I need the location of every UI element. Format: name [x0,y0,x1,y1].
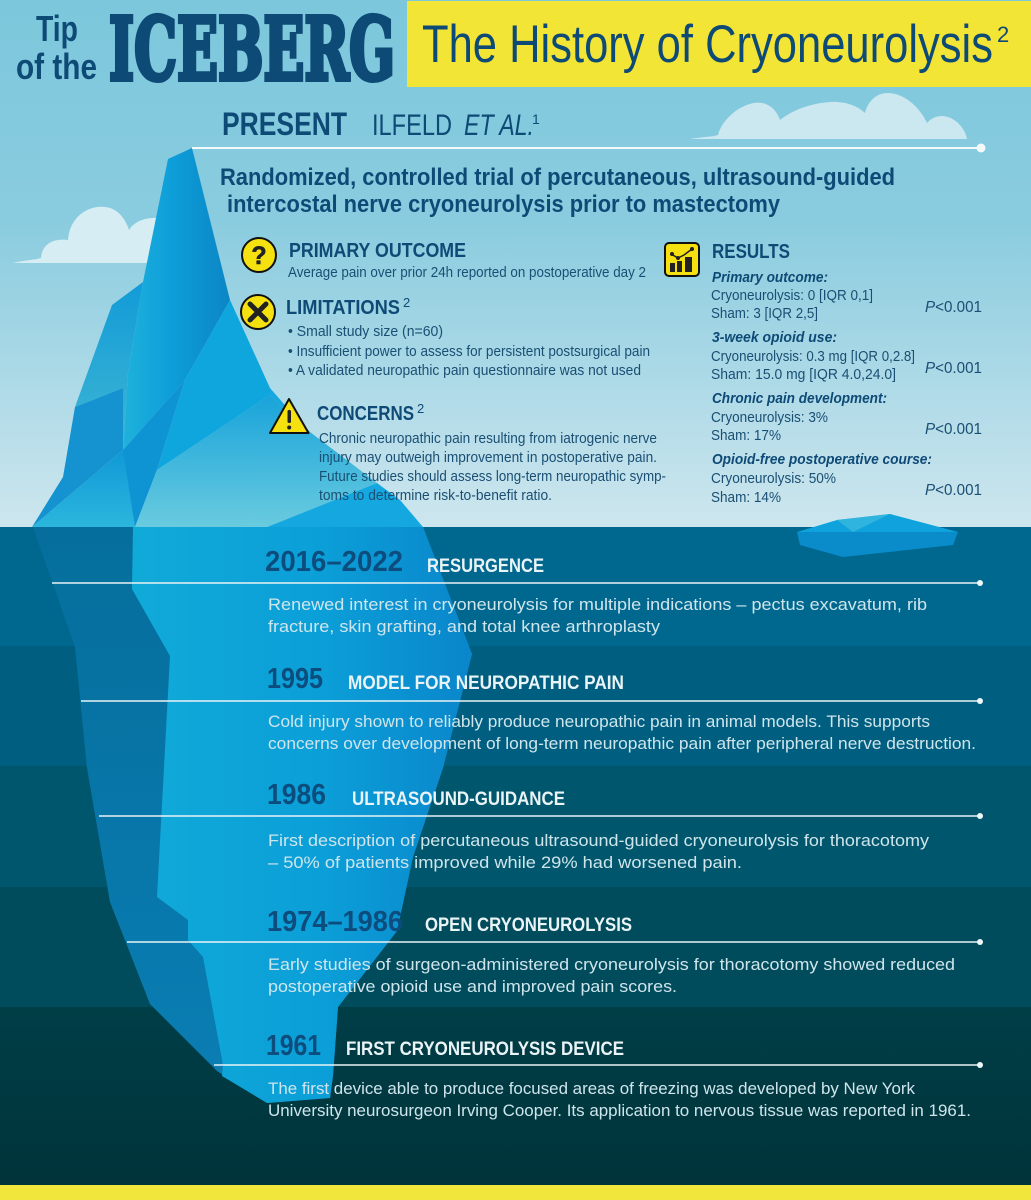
iceberg: main spire [123,148,230,450]
icon: question mark: ? [251,242,267,270]
panel: concerns [270,399,666,504]
study description: intercostal nerve cryoneurolysis prior to mastectomy [227,191,781,218]
result: opioid-free course: Opioid-free postoperative course: [712,452,932,468]
panel: concerns: Future studies should assess long-term neuropathic symp- [319,469,666,485]
panel: results: RESULTS [712,241,790,263]
panel: limitations: • A validated neuropathic pain questionnaire was not used [288,363,641,379]
iceberg [32,148,472,1103]
timeline: 1961 first cryoneurolysis device: 1961 [266,1030,321,1062]
timeline: 1974-1986 open cryoneurolysis [127,906,983,996]
present timeline rule [192,144,986,152]
panel: primary outcome [242,238,646,281]
iceberg: lower right facet [267,483,423,527]
result: primary outcome: Sham: 3 [IQR 2,5] [711,306,818,322]
icon: question mark [242,238,276,272]
iceberg: underwater inner facet [132,527,472,1103]
panel: limitations [241,295,650,379]
result: primary outcome: Primary outcome: [712,270,828,286]
iceberg: underwater outer facet [33,527,472,1103]
panel: limitations: LIMITATIONS [286,297,400,319]
result: chronic pain: Cryoneurolysis: 3% [711,410,828,426]
result: primary outcome: Cryoneurolysis: 0 [IQR 0,1] [711,288,873,304]
cloud: right [690,93,967,139]
result: chronic pain: Chronic pain development: [712,391,887,407]
cloud: left [13,207,160,263]
timeline: 2016-2022 resurgence: fracture, skin grafting, and total knee arthroplasty [268,617,661,636]
result: opioid use [711,330,982,383]
iceberg: above-water bottom left facet [32,450,135,527]
panel: concerns: Chronic neuropathic pain resulting from iatrogenic nerve [319,431,657,447]
title banner [407,1,1031,87]
timeline: 1961 first cryoneurolysis device: FIRST CRYONEUROLYSIS DEVICE [346,1039,624,1060]
timeline: 1961 first cryoneurolysis device [214,1030,983,1120]
timeline: 1974-1986 open cryoneurolysis: 1974–1986 [267,906,403,938]
result: opioid-free course [711,452,982,506]
panel: results [665,241,982,506]
result: chronic pain [711,391,982,444]
panel: concerns: 2 [417,401,424,416]
panel: limitations: 2 [403,295,410,310]
water depth bands [0,527,1031,1185]
timeline: 1995 model for neuropathic pain: concerns over development of long-term neuropathic pain after peripheral nerve destruction. [268,734,976,753]
timeline: 1974-1986 open cryoneurolysis: Early studies of surgeon-administered cryoneurolysis for thoracotomy showed reduced [268,955,955,974]
present heading: PRESENT [222,106,347,142]
timeline: 1995 model for neuropathic pain: 1995 [267,663,323,695]
panel: primary outcome: PRIMARY OUTCOME [289,240,466,262]
panel: concerns: toms to determine risk-to-benefit ratio. [319,488,552,504]
result: opioid-free course: P<0.001 [925,482,982,499]
title: Tip of the [16,8,97,87]
title: Tip of the: Tip [36,8,78,49]
result: opioid-free course: Cryoneurolysis: 50% [711,471,836,487]
timeline: 1986 ultrasound-guidance [99,779,983,872]
panel: limitations: • Small study size (n=60) [288,324,443,340]
timeline: 2016-2022 resurgence: Renewed interest in cryoneurolysis for multiple indications – pectus excavatum, rib [268,595,927,614]
timeline: 1986 ultrasound-guidance: ULTRASOUND-GUIDANCE [352,789,565,810]
timeline: 2016-2022 resurgence: 2016–2022 [265,546,403,578]
timeline: 1974-1986 open cryoneurolysis: OPEN CRYONEUROLYSIS [425,915,632,936]
result: primary outcome: P<0.001 [925,299,982,316]
timeline: 1961 first cryoneurolysis device: University neurosurgeon Irving Cooper. Its application to nervous tissue was reported in 1961. [268,1101,971,1120]
title: Tip of the: of the [16,46,97,87]
result: chronic pain: Sham: 17% [711,428,781,444]
icon: chart [665,243,699,276]
timeline: 2016-2022 resurgence: RESURGENCE [427,556,544,577]
result: opioid use: 3-week opioid use: [712,330,837,346]
result: opioid use: P<0.001 [925,360,982,377]
timeline: 1995 model for neuropathic pain [81,663,983,753]
timeline: 1986 ultrasound-guidance: – 50% of patients improved while 29% had worsened pain. [268,853,742,872]
iceberg: above-water left back facet [75,282,143,450]
result: primary outcome [711,270,982,322]
timeline: 1974-1986 open cryoneurolysis: postoperative opioid use and improved pain scores. [268,977,677,996]
iceberg: shoulder facet [270,388,310,432]
title banner: 2 [997,22,1009,47]
panel: concerns: CONCERNS [317,403,414,425]
timeline: 1995 model for neuropathic pain: Cold injury shown to reliably produce neuropathic pain in animal models. This supports [268,712,930,731]
panel: primary outcome: Average pain over prior 24h reported on postoperative day 2 [288,265,646,281]
icon: warning triangle [270,399,308,433]
present heading [222,106,540,142]
study description: Randomized, controlled trial of percutaneous, ultrasound-guided [220,164,895,191]
iceberg: lower pale facet [135,395,377,527]
panel: limitations: • Insufficient power to assess for persistent postsurgical pain [288,344,650,360]
result: opioid use: Cryoneurolysis: 0.3 mg [IQR 0,2.8] [711,349,915,365]
timeline: 1986 ultrasound-guidance: First description of percutaneous ultrasound-guided cryoneurolysis for thoracotomy [268,831,930,850]
result: opioid-free course: Sham: 14% [711,490,781,506]
present heading: 1 [532,111,540,127]
timeline: 1986 ultrasound-guidance: 1986 [267,779,326,811]
bottom yellow strip [0,1185,1031,1200]
iceberg: above-water left lower facet [32,388,123,527]
iceberg: right facet [157,300,270,470]
result: chronic pain: P<0.001 [925,421,982,438]
panel: concerns: injury may outweigh improvement in postoperative pain. [319,450,657,466]
timeline: 1995 model for neuropathic pain: MODEL FOR NEUROPATHIC PAIN [348,673,624,694]
present heading: ILFELD [372,109,452,142]
timeline: 1961 first cryoneurolysis device: The first device able to produce focused areas of freezing was developed by New York [268,1079,915,1098]
result: opioid use: Sham: 15.0 mg [IQR 4.0,24.0] [711,367,896,383]
title: ICEBERG: ICEBERG [109,0,395,100]
icon: cross [241,295,275,329]
sky background [0,0,1031,527]
study description [220,164,895,218]
present heading: ET AL. [464,109,534,142]
timeline: 2016-2022 resurgence [52,546,983,636]
iceberg: center wedge [123,380,185,527]
small ice floe [797,514,958,557]
